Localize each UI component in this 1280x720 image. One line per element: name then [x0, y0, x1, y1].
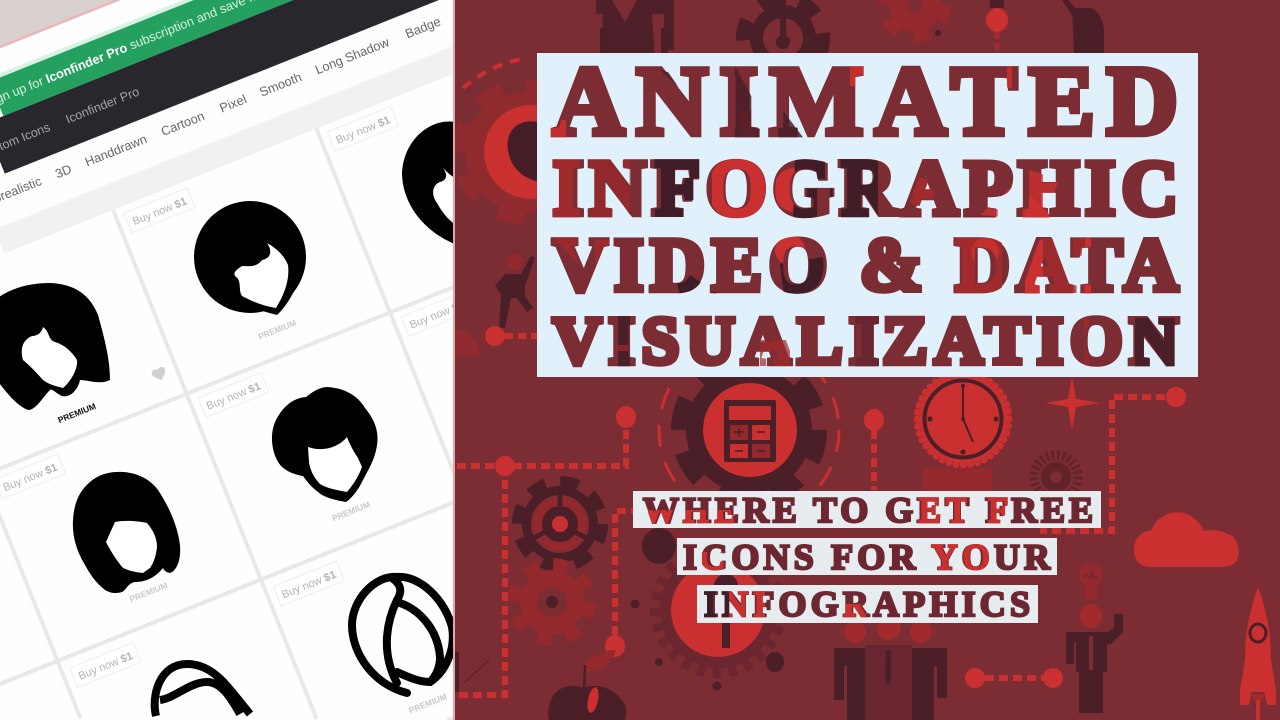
icon: cloud — [1134, 512, 1239, 567]
panel: title background — [537, 53, 1198, 377]
subtitle: WHERE TO GET FREE — [643, 490, 1093, 530]
icon: apple — [548, 650, 626, 720]
buy now buttons: Buy now $1 — [1, 462, 59, 494]
style filter tabs: Smooth — [257, 69, 304, 100]
panel: tilted icon marketplace screenshot — [0, 0, 455, 720]
icon: outline ball hair bottom right — [352, 577, 453, 693]
icon: calculator — [724, 400, 776, 462]
style filter tabs: Long Shadow — [313, 34, 392, 77]
buy now buttons: Buy now $1 — [408, 299, 466, 331]
clock badge — [917, 373, 1009, 508]
top node connector — [986, 8, 1008, 54]
subtitle: ICONS FOR YOUR — [683, 537, 1051, 577]
title knockout artwork — [548, 60, 1175, 368]
subtitle — [643, 490, 1093, 624]
icon: outline hair bottom centre — [155, 664, 250, 716]
icon: long bob hair middle left — [73, 472, 180, 593]
icon: rocket — [1240, 587, 1276, 720]
top red gear — [884, 0, 946, 37]
buy now buttons: Buy now $1 — [131, 196, 189, 228]
premium captions: PREMIUM — [128, 580, 169, 604]
style filter tabs: Handdrawn — [83, 131, 149, 169]
icon: round hair top right — [402, 122, 455, 244]
icon: head in gear — [455, 79, 537, 225]
style filter tabs: Badge — [403, 14, 443, 41]
style filter tabs: 3D — [53, 161, 74, 181]
bottom-left line and edge fragments — [455, 652, 489, 692]
left node connector — [485, 326, 537, 346]
subtitle: INFOGRAPHICS — [704, 584, 1030, 624]
title: INFOGRAPHIC — [553, 144, 1178, 231]
dim red gear — [514, 564, 590, 640]
icon: light bulb — [1079, 563, 1103, 600]
icon: round hair top centre — [194, 201, 306, 315]
browser chrome background — [0, 0, 194, 78]
icon: heart — [152, 367, 166, 380]
buy now buttons — [0, 107, 472, 687]
title: ANIMATED — [553, 47, 1178, 156]
style filter tabs — [0, 19, 440, 202]
style filter tabs: Pixel — [217, 91, 249, 116]
scattered dots — [630, 528, 784, 690]
connector nodes — [495, 387, 1186, 688]
subtitle line backgrounds — [633, 491, 1101, 623]
calculator gear — [658, 377, 840, 491]
icon: short hair middle right — [272, 387, 378, 502]
style filter tabs: Cartoon — [159, 108, 207, 139]
top dark gear — [736, 0, 830, 53]
top silhouettes — [596, 0, 1104, 53]
businessmen group — [834, 616, 947, 720]
dark navigation bar: Iconfinder Pro — [64, 85, 141, 126]
panel: maroon background illustration — [455, 0, 1280, 720]
title: VIDEO & DATA — [553, 224, 1178, 307]
dotted connector network — [455, 397, 1165, 695]
premium captions: PREMIUM — [330, 499, 371, 523]
title: VISUALIZATION — [553, 304, 1178, 378]
icon: bob hair top left — [0, 283, 110, 410]
dark gear outline — [518, 482, 602, 566]
dark navigation bar — [0, 0, 439, 174]
buy now buttons: Buy now $1 — [77, 650, 135, 683]
premium captions: PREMIUM — [257, 318, 298, 342]
dim sun gear — [1034, 455, 1078, 499]
big wrench gear — [655, 547, 781, 673]
buy now buttons: Buy now $1 — [280, 569, 338, 601]
subtitle knockout artwork — [648, 496, 1008, 620]
running figure — [495, 254, 535, 328]
premium captions — [56, 318, 448, 716]
premium captions: PREMIUM — [407, 691, 448, 716]
businessman with raised arm — [1066, 604, 1123, 713]
left edge shape — [455, 330, 481, 356]
buy now buttons: Buy now $1 — [205, 380, 263, 413]
premium captions: PREMIUM — [56, 401, 97, 425]
icon: four-point star — [1045, 376, 1100, 430]
dashed arrow arc — [463, 59, 522, 88]
title — [548, 47, 1178, 378]
buy now buttons: Buy now $1 — [334, 114, 392, 147]
